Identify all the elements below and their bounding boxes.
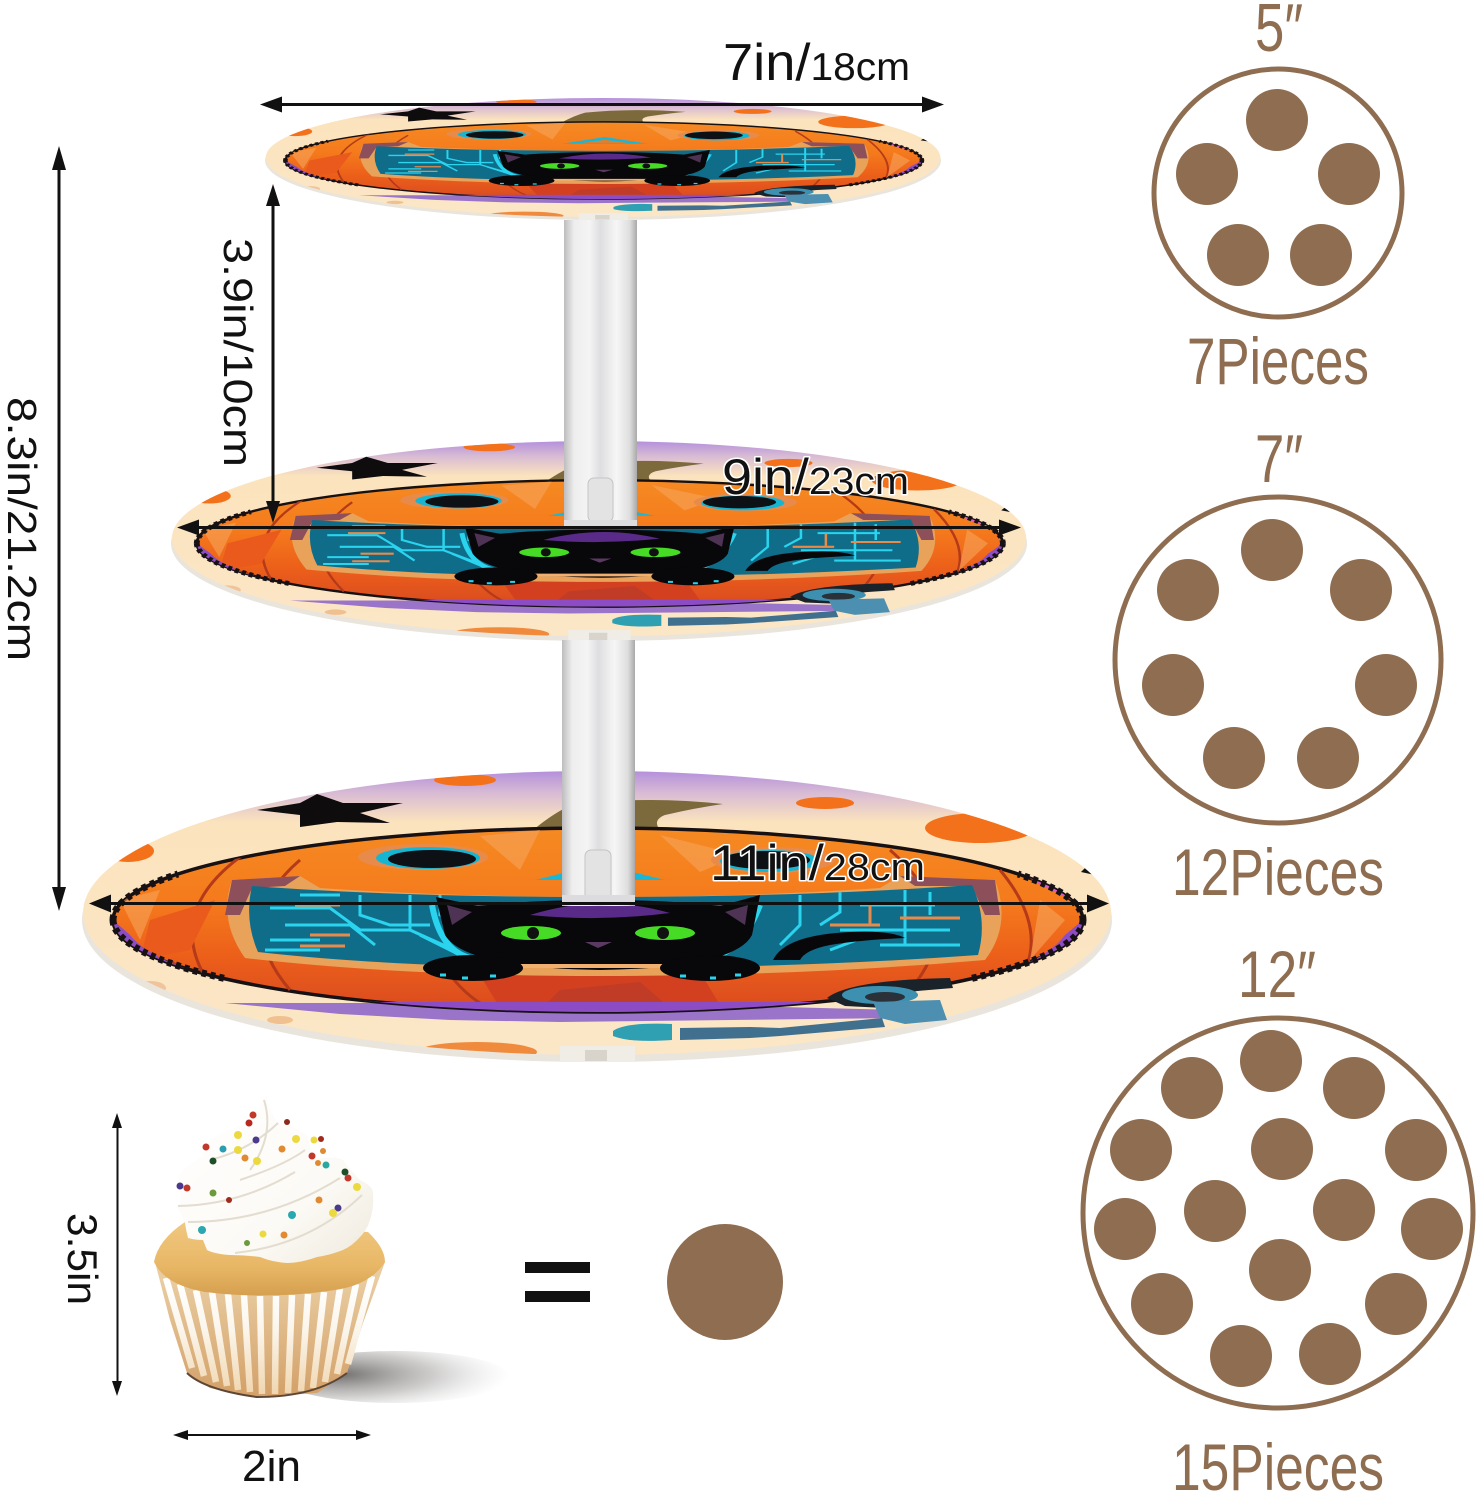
caption: 12 pieces: 12Pieces [1172,835,1384,909]
middle tier plate [171,441,1027,641]
cupcake [154,1093,510,1403]
arrow: cupcake width [173,1430,371,1440]
label: middle tier width: 9in/23cm [722,449,909,505]
arrow: middle tier width [177,520,1021,536]
ring: 5 inch tier layout [1154,0,1402,398]
label: cupcake width: 2in [242,1442,301,1491]
arrow: total height [52,146,66,911]
arrow: bottom tier width [89,894,1109,912]
label: cupcake height: 3.5in [59,1213,106,1305]
label: tier spacing: 3.9in/10cm [215,238,261,467]
ring: 7 inch tier layout [1115,421,1441,909]
arrow: cupcake height [112,1113,122,1396]
label: total height: 8.3in/21.2cm [0,397,45,661]
heading: 7 inch: 7″ [1255,421,1303,497]
heading: 12 inch: 12″ [1238,937,1316,1011]
bottom tier plate [82,771,1112,1062]
arrow: tier spacing [266,184,280,523]
icon: single cupcake dot [667,1224,783,1340]
arrow: top tier width [260,96,944,112]
label: top tier width: 7in/18cm [723,34,910,92]
top tier plate [265,98,941,220]
label: bottom tier width: 11in/28cm [710,835,925,891]
ring: 12 inch tier layout [1083,937,1473,1500]
sprinkles [176,1112,361,1246]
upper acrylic support column [564,220,637,528]
equals sign [525,1262,590,1302]
caption: 7 pieces: 7Pieces [1187,324,1369,398]
lower acrylic support column [562,640,635,906]
